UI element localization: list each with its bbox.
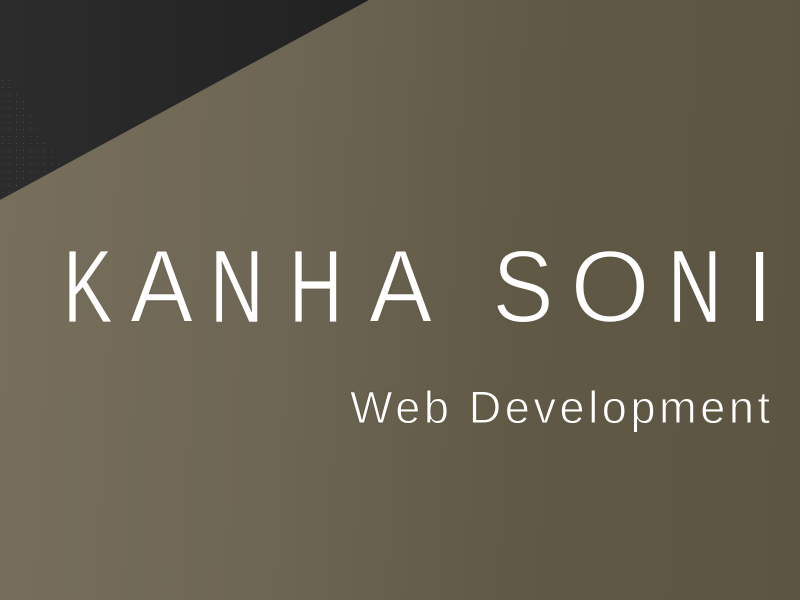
title: KANHA SONI bbox=[63, 228, 773, 345]
title: KANHA SONI: H bbox=[289, 230, 343, 345]
title: KANHA SONI: A bbox=[369, 228, 432, 344]
title: KANHA SONI: K bbox=[63, 230, 112, 345]
title: KANHA SONI: I bbox=[746, 230, 773, 345]
title: KANHA SONI: S bbox=[492, 228, 554, 344]
title: KANHA SONI: O bbox=[570, 229, 650, 344]
dark corner triangle bbox=[0, 0, 369, 200]
title: KANHA SONI: A bbox=[130, 228, 193, 344]
title: KANHA SONI: N bbox=[210, 230, 264, 345]
title: KANHA SONI: N bbox=[668, 230, 722, 345]
subtitle: Web Development: Web Development bbox=[350, 382, 770, 433]
